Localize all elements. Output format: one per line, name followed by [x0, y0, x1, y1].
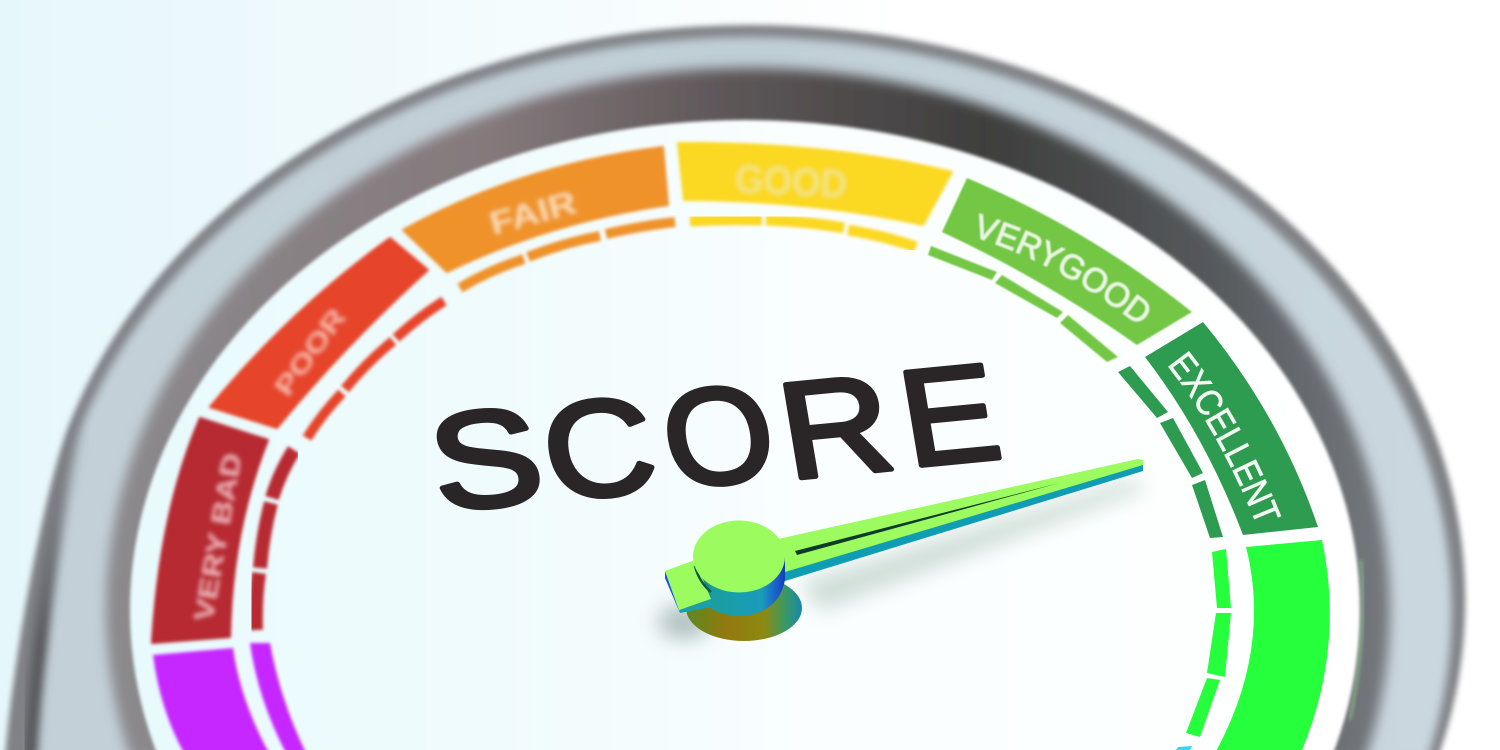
- needle top: [778, 459, 1143, 572]
- bezel left dark stripe: [30, 420, 84, 750]
- label: very bad: VERY BAD: [188, 451, 248, 623]
- segment: cyan sliver: [1176, 746, 1192, 750]
- title: SCORE: O: [652, 356, 785, 517]
- segment: good: [678, 143, 952, 225]
- title: SCORE: C: [532, 368, 666, 529]
- label: fair: FAIR: [486, 184, 580, 242]
- label: very good: VERYGOOD: [978, 212, 1150, 323]
- ticks: good: [690, 220, 916, 247]
- title: SCORE: R: [769, 346, 903, 508]
- segment: excellent: [1145, 322, 1318, 535]
- segment: very bad: [152, 418, 268, 643]
- label: excellent: EXCELLENT: [1168, 351, 1282, 520]
- ticks: fair: [460, 222, 675, 288]
- bezel inner dark band: [106, 68, 1390, 750]
- title: SCORE: E: [889, 335, 1010, 495]
- ticks: bright green: [1186, 549, 1231, 737]
- hub shadow crescent: [695, 566, 711, 592]
- ticks: very bad: [256, 450, 294, 630]
- label: poor: POOR: [268, 303, 352, 401]
- icon: gauge needle: [665, 459, 1143, 641]
- ticks: very good: [928, 246, 1118, 362]
- needle slit: [795, 483, 1059, 555]
- segment: poor: [210, 238, 428, 428]
- green rim reflection: [1350, 560, 1363, 720]
- needle shadow: [658, 478, 1145, 640]
- title: SCORE: [419, 335, 1010, 541]
- ticks: purple: [250, 643, 307, 750]
- ticks: excellent: [1118, 366, 1223, 538]
- needle base disc: [686, 575, 802, 641]
- needle tail: [665, 560, 712, 613]
- segment: fair: [403, 147, 668, 272]
- label: good: GOOD: [734, 157, 848, 207]
- segment: very good: [941, 177, 1192, 346]
- segment: purple: [153, 648, 270, 750]
- segment: bright green: [1214, 540, 1330, 750]
- needle side: [785, 464, 1143, 581]
- ticks: poor: [307, 301, 444, 438]
- title: SCORE: S: [419, 379, 553, 541]
- needle hub top: [693, 520, 785, 592]
- gauge face: [130, 120, 1360, 750]
- needle hub side: [694, 557, 785, 616]
